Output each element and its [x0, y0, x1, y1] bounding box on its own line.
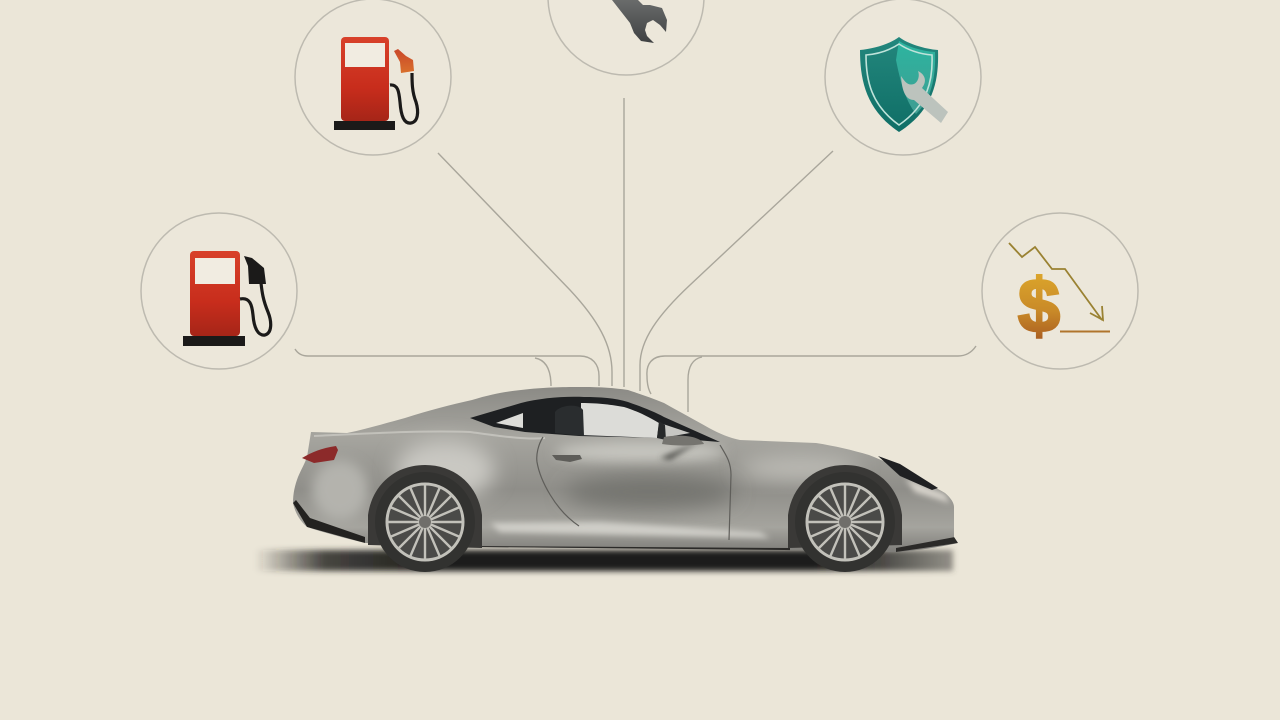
icon: wrench: [612, 0, 667, 43]
panel: depreciation circle right: [982, 213, 1138, 369]
headlight: [878, 456, 938, 490]
icon: fuel pump red and black: [183, 251, 271, 346]
door seams: [537, 437, 731, 540]
connector lines: [295, 98, 976, 412]
panel: fuel icon circle left: [141, 213, 297, 369]
panel: fuel icon circle upper left: [295, 0, 451, 155]
panel: insurance shield circle upper right: [825, 0, 981, 155]
front wheel: [788, 465, 902, 572]
car windows: [470, 397, 720, 446]
door handle: [552, 455, 582, 462]
icon: falling value arrow: [1009, 243, 1103, 320]
icon: fuel pump with orange nozzle: [334, 37, 418, 130]
ground shadow: [255, 550, 953, 571]
infographic canvas: [140, 0, 1139, 576]
car body: [293, 387, 958, 553]
icon: shield with wrench: [860, 37, 948, 132]
car: [293, 387, 958, 572]
icon: baseline: [1060, 330, 1110, 332]
tail light: [302, 446, 338, 463]
panel: maintenance wrench circle top: [548, 0, 704, 75]
icon: dollar sign: $: [1018, 264, 1060, 349]
rear wheel: [368, 465, 482, 572]
